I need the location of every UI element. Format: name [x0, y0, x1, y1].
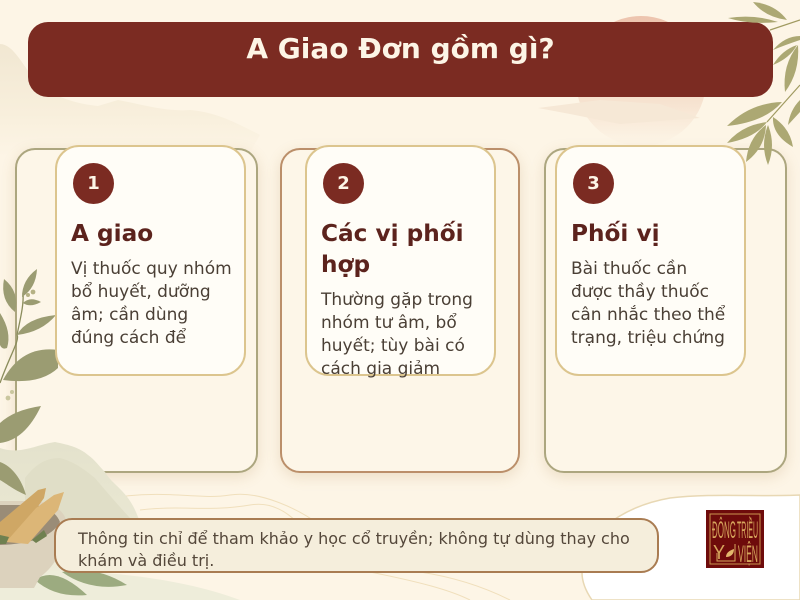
text: Phối vị description	[571, 259, 725, 348]
bottom sage leaves	[35, 570, 127, 595]
callout: disclaimer	[54, 518, 659, 573]
text: Phối vị description: trạng, triệu chứng	[571, 328, 725, 348]
callout: disclaimer: khám và điều trị.	[78, 551, 214, 570]
text: Các vị phối hợp description: huyết; tùy bài có	[321, 336, 465, 356]
callout: disclaimer: Thông tin chỉ để tham khảo y học cổ truyền; không tự dùng thay cho	[78, 529, 630, 548]
mist mountains	[0, 442, 150, 600]
heading: Phối vị: Phối vị	[571, 220, 660, 247]
number badge 2	[323, 163, 364, 204]
panel: card 3 backing	[544, 148, 787, 473]
text: A giao description: đúng cách để	[71, 328, 186, 348]
text: Phối vị description: Bài thuốc cần	[571, 259, 687, 279]
bamboo leaves	[727, 2, 800, 165]
panel: Phối vị	[555, 145, 746, 376]
logo: Đông Triều Y Viện seal	[706, 510, 764, 568]
text: Các vị phối hợp description: nhóm tư âm, bổ	[321, 313, 457, 333]
number badge 1	[73, 163, 114, 204]
number badge 2: 2	[337, 173, 350, 194]
heading: Các vị phối hợp: Các vị phối	[321, 220, 464, 247]
heading: A giao: A giao	[71, 220, 153, 247]
panel: card 1 backing	[15, 148, 258, 473]
text: Các vị phối hợp description: Thường gặp trong	[321, 290, 473, 310]
text: Các vị phối hợp description: cách gia giảm	[321, 359, 440, 379]
panel: card 2 backing	[280, 148, 520, 473]
heading: Các vị phối hợp	[321, 220, 464, 278]
text: Phối vị description: cân nhắc theo thể	[571, 305, 725, 325]
text: A giao description: âm; cần dùng	[71, 305, 188, 325]
logo: Đông Triều Y Viện seal: Y	[713, 542, 725, 564]
number badge 3: 3	[587, 173, 600, 194]
herb branch	[0, 269, 58, 495]
heading: Các vị phối hợp: hợp	[321, 251, 370, 278]
icon: mortar with herb slices	[0, 488, 66, 588]
number badge 3	[573, 163, 614, 204]
text: A giao description: Vị thuốc quy nhóm	[71, 259, 232, 279]
panel: Các vị phối hợp	[305, 145, 496, 376]
title: A Giao Đơn gồm gì?	[246, 32, 555, 65]
number badge 1: 1	[87, 173, 100, 194]
title banner	[28, 22, 773, 97]
ground	[0, 571, 240, 600]
text: A giao description: bổ huyết, dưỡng	[71, 282, 211, 302]
panel: A giao	[55, 145, 246, 376]
text: Các vị phối hợp description	[320, 290, 473, 379]
text: Phối vị description: được thầy thuốc	[571, 282, 709, 302]
text: A giao description	[71, 259, 232, 348]
